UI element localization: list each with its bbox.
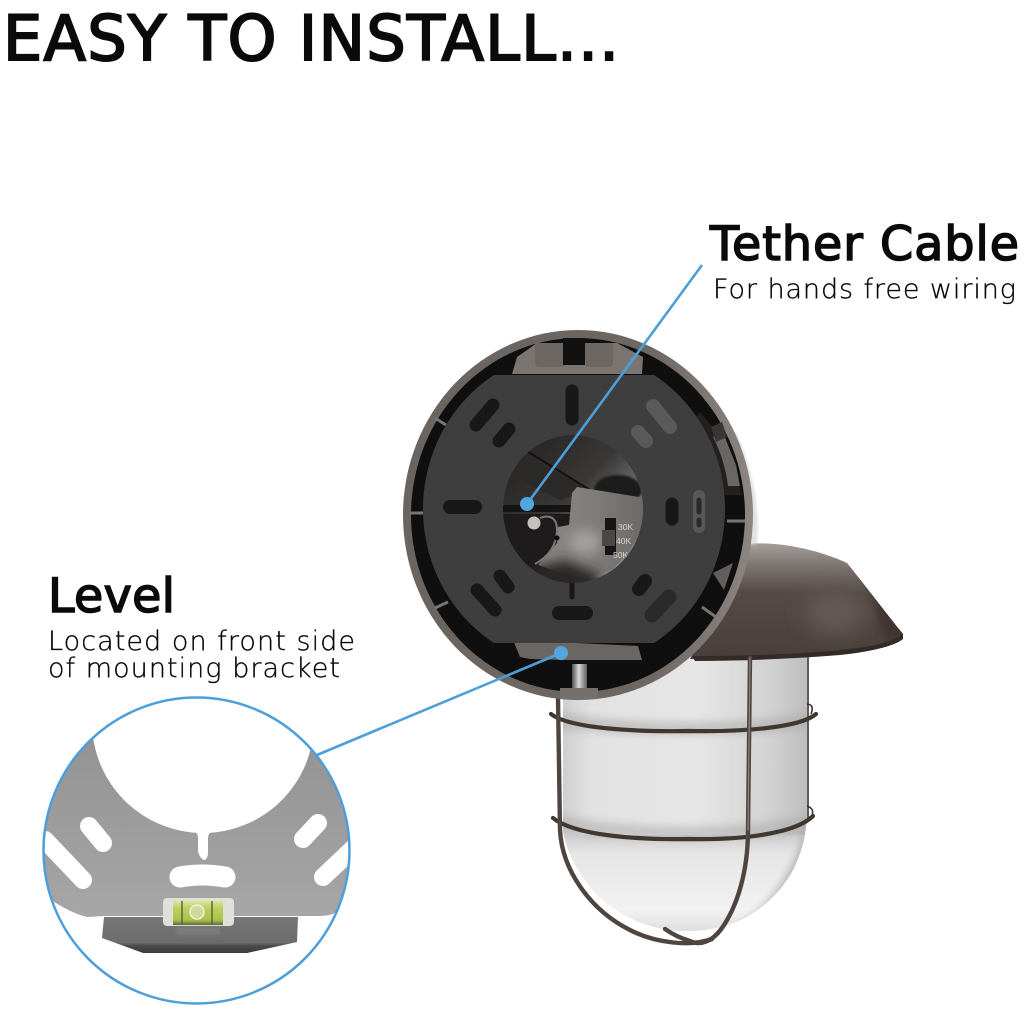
dark arc behind bracket [593,474,642,498]
callout: tether cable [709,217,1019,305]
switch labels: 30K [618,522,633,532]
text: level description: Located on front side [48,626,355,657]
central opening [503,435,643,583]
top tab [512,338,643,374]
wire: left hoop [558,698,712,943]
outer rim [403,330,753,700]
back cage wires [806,657,813,820]
color temperature switch [602,518,616,555]
inset: level detail [42,696,351,1005]
glass globe [555,652,815,935]
color temperature bracket [534,487,643,583]
bottom tab [513,640,642,660]
switch labels: 40K [616,536,631,546]
tether ball [528,516,540,530]
text: tether cable description: For hands free wiring [713,274,1016,305]
wire ring: lower [553,816,813,839]
inner cavity [411,338,745,692]
leader dots [520,497,568,660]
wire cage [551,658,816,943]
mounting disc [403,330,758,700]
level pin [560,664,598,699]
cavity details [690,412,742,590]
heading: tether cable: Tether Cable [709,217,1019,272]
wire ring: upper [551,714,816,731]
tether cable wire [535,516,557,564]
bracket flange [102,917,298,953]
mounting plate [423,375,725,643]
bracket plate [44,739,348,953]
inset ring [44,698,350,1004]
heading: level: Level [48,569,175,624]
bracket slots [45,823,360,880]
leader lines [317,265,702,755]
bubble level [163,898,234,935]
plate slots [450,391,699,615]
switch labels: 50K [613,550,628,560]
lamp fixture body [551,540,910,943]
rim spokes [410,418,745,617]
title: EASY TO INSTALL... [3,2,619,75]
switch labels [613,524,633,558]
callout: level [48,569,355,684]
wire: right hoop [665,658,750,943]
text: level description: of mounting bracket [48,653,340,684]
soft halo behind rim [735,430,758,545]
shade [690,540,910,665]
